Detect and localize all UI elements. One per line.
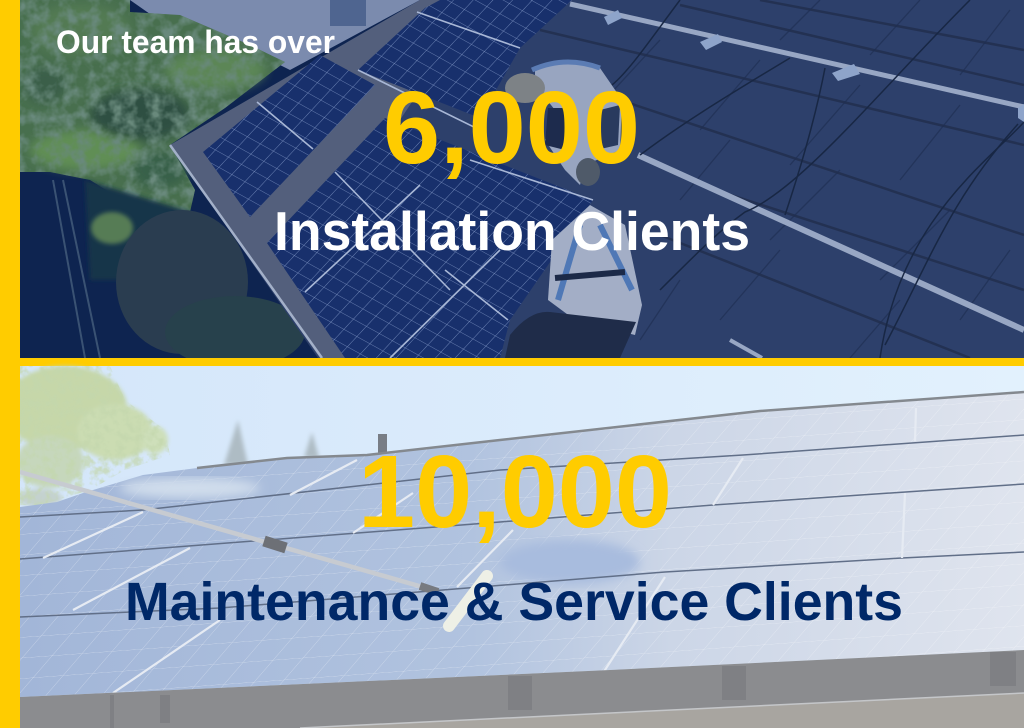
chimney pipe [378,434,387,458]
building behind trees [130,0,420,70]
label: Maintenance & Service Clients: Maintenance & Service Clients [125,572,903,632]
junction boxes [604,10,1024,122]
roof [170,0,1024,358]
lower worker [505,205,642,358]
panel: installation photo [20,0,1024,368]
small bush [91,212,133,244]
stat: 6,000: 6,000 [383,70,640,185]
label: Installation Clients: Installation Clients [274,200,750,262]
cables [612,0,1024,358]
hedges [116,210,305,368]
roof tile joints [600,0,1010,358]
intro text: Our team has over [56,24,335,60]
solar array lower [267,118,593,358]
solar array upper [358,0,572,130]
roof fascia [20,650,1024,728]
wet patch [500,540,640,584]
left yellow bar [0,0,20,728]
cleaning pole [20,472,487,626]
divider bar [20,358,1024,366]
tree foliage [3,366,170,507]
distant trees [224,420,319,465]
solar roof [20,392,1024,697]
panel: maintenance photo [3,366,1024,728]
dark undergrowth [85,180,215,280]
fence lines [53,180,100,358]
cleaning brush [449,576,487,626]
solar array upper left [203,55,375,217]
spray haze [120,478,260,498]
roof tile courses [540,0,1024,358]
tree canopy [20,0,285,212]
panel seams [20,435,1024,617]
stat: 10,000: 10,000 [358,434,672,549]
upper worker [505,62,622,186]
mounting rails [570,4,1024,358]
